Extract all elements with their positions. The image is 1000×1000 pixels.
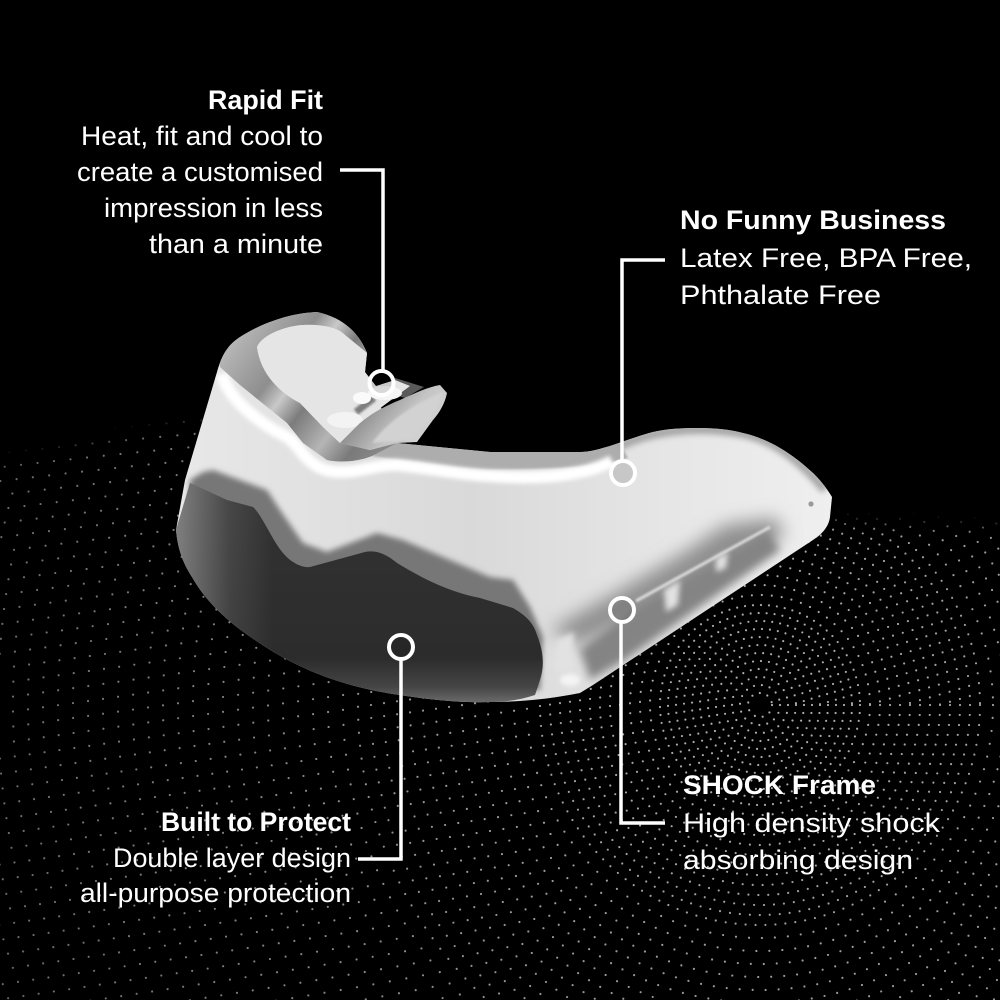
callout: Rapid Fit leader [340, 170, 394, 395]
mouthguard: grooved lower band [580, 530, 780, 680]
text: Rapid Fit: impression in less [104, 193, 323, 223]
mouthguard: light blobs in groove [556, 552, 731, 653]
callout: No Funny Business leader [611, 260, 665, 485]
text: Built to Protect: Double layer design [113, 843, 351, 873]
mouthguard: main translucent body [176, 312, 832, 702]
text: Rapid Fit: Heat, fit and cool to [81, 121, 323, 151]
mouthguard: dark layer left glow [176, 483, 535, 702]
text: Rapid Fit: Rapid Fit [208, 85, 323, 115]
text: SHOCK Frame: SHOCK Frame [683, 770, 876, 800]
text: No Funny Business [680, 205, 972, 310]
background: dotted wave pattern [0, 419, 1000, 1000]
mouthguard: grey rim around bite pad [220, 312, 397, 461]
mouthguard: back dark strip [385, 378, 424, 398]
text: No Funny Business: No Funny Business [680, 205, 946, 235]
mouthguard: soft shadow above groove [550, 518, 785, 645]
callout: Built to Protect leader [358, 635, 413, 859]
text: Rapid Fit: than a minute [149, 229, 323, 259]
text: Built to Protect: all-purpose protection [80, 878, 351, 908]
mouthguard: dark outer layer [176, 483, 543, 702]
text: SHOCK Frame: High density shock [683, 808, 941, 838]
text: No Funny Business: Latex Free, BPA Free, [680, 243, 972, 273]
mouthguard: front top sheen [372, 440, 628, 470]
text: SHOCK Frame: absorbing design [683, 845, 913, 875]
mouthguard: groove highlight line [636, 527, 770, 601]
callout: SHOCK Frame leader [610, 598, 665, 823]
text: Rapid Fit [77, 85, 323, 259]
mouthguard: top right edge sheen [618, 430, 825, 490]
text: Rapid Fit: create a customised [77, 157, 323, 187]
mouthguard: lower corner highlight [560, 674, 580, 686]
mouthguard: front tray crescent [340, 385, 447, 450]
text: Built to Protect [80, 807, 351, 908]
mouthguard: crescent inner highlight [372, 392, 443, 443]
mouthguard: bright ridge highlight [222, 374, 612, 477]
text: Built to Protect: Built to Protect [161, 807, 351, 837]
mouthguard: shadow above dark layer [190, 470, 543, 690]
mouthguard: inner teeth impressions [327, 386, 402, 428]
text: SHOCK Frame [683, 770, 941, 875]
mouthguard [176, 312, 832, 702]
mouthguard: bite pad [257, 325, 410, 443]
text: No Funny Business: Phthalate Free [680, 280, 881, 310]
mouthguard: vent dot [808, 501, 814, 507]
